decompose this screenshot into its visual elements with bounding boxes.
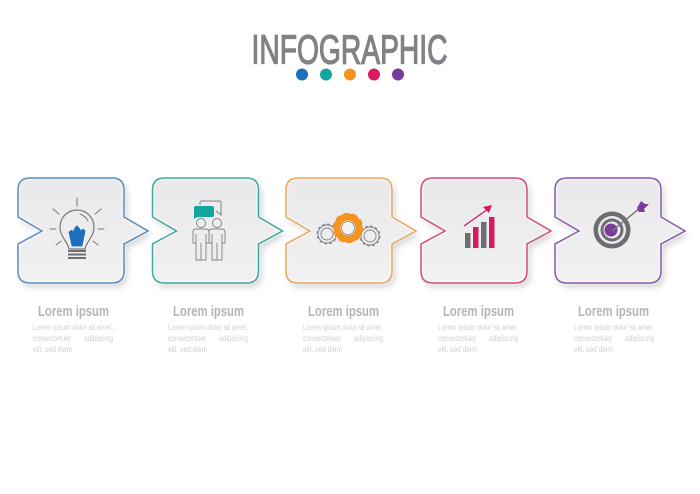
panel: step 2 team	[152, 178, 282, 283]
text block: step 1: Lorem ipsum dolor sit amet,	[33, 323, 113, 332]
title: INFOGRAPHIC	[252, 26, 448, 72]
text block: step 1: elit, sed diam	[33, 345, 72, 354]
icon: target	[594, 201, 649, 248]
icon: light bulb	[50, 198, 104, 258]
text block: step 1: consectetuer	[33, 334, 71, 343]
text block: step 5: adipiscing	[625, 334, 654, 343]
panel: step 5 target	[555, 178, 685, 283]
text block: step 4: consectetuer	[438, 334, 476, 343]
icon: two people talking	[193, 201, 225, 260]
text block: step 5: elit, sed diam	[574, 345, 613, 354]
text block: step 3: consectetuer	[303, 334, 341, 343]
box 2	[152, 178, 282, 283]
text block: step 2: consectetuer	[168, 334, 206, 343]
text block: step 4: Lorem ipsum dolor sit amet,	[438, 323, 518, 332]
box 1	[18, 178, 148, 283]
panel: step 1 idea	[18, 178, 148, 283]
text block: step 3: Lorem ipsum	[308, 303, 379, 320]
text block: step 5	[574, 303, 654, 354]
box 3	[286, 178, 416, 283]
text block: step 1: adipiscing	[84, 334, 113, 343]
text block: step 2	[168, 303, 248, 354]
text block: step 3: elit, sed diam	[303, 345, 342, 354]
text block: step 4	[438, 303, 518, 354]
text block: step 3: adipiscing	[354, 334, 383, 343]
text block: step 5: Lorem ipsum dolor sit amet,	[574, 323, 654, 332]
colour dots	[296, 68, 404, 80]
text block: step 5: consectetuer	[574, 334, 612, 343]
text block: step 4: adipiscing	[489, 334, 518, 343]
text block: step 2: Lorem ipsum dolor sit amet,	[168, 323, 248, 332]
box 4	[421, 178, 551, 283]
text block: step 1: Lorem ipsum	[38, 303, 109, 320]
icon: gears	[317, 214, 380, 246]
panel: step 4 growth	[421, 178, 551, 283]
text block: step 2: elit, sed diam	[168, 345, 207, 354]
text block: step 5: Lorem ipsum	[578, 303, 649, 320]
text block: step 4: elit, sed diam	[438, 345, 477, 354]
text block: step 2: adipiscing	[219, 334, 248, 343]
text block: step 2: Lorem ipsum	[173, 303, 244, 320]
box 5	[555, 178, 685, 283]
text block: step 3: Lorem ipsum dolor sit amet,	[303, 323, 383, 332]
text block: step 3	[303, 303, 383, 354]
text block: step 4: Lorem ipsum	[443, 303, 514, 320]
panel: step 3 gears	[286, 178, 416, 283]
text block: step 1	[33, 303, 113, 354]
icon: bar chart	[464, 205, 494, 248]
